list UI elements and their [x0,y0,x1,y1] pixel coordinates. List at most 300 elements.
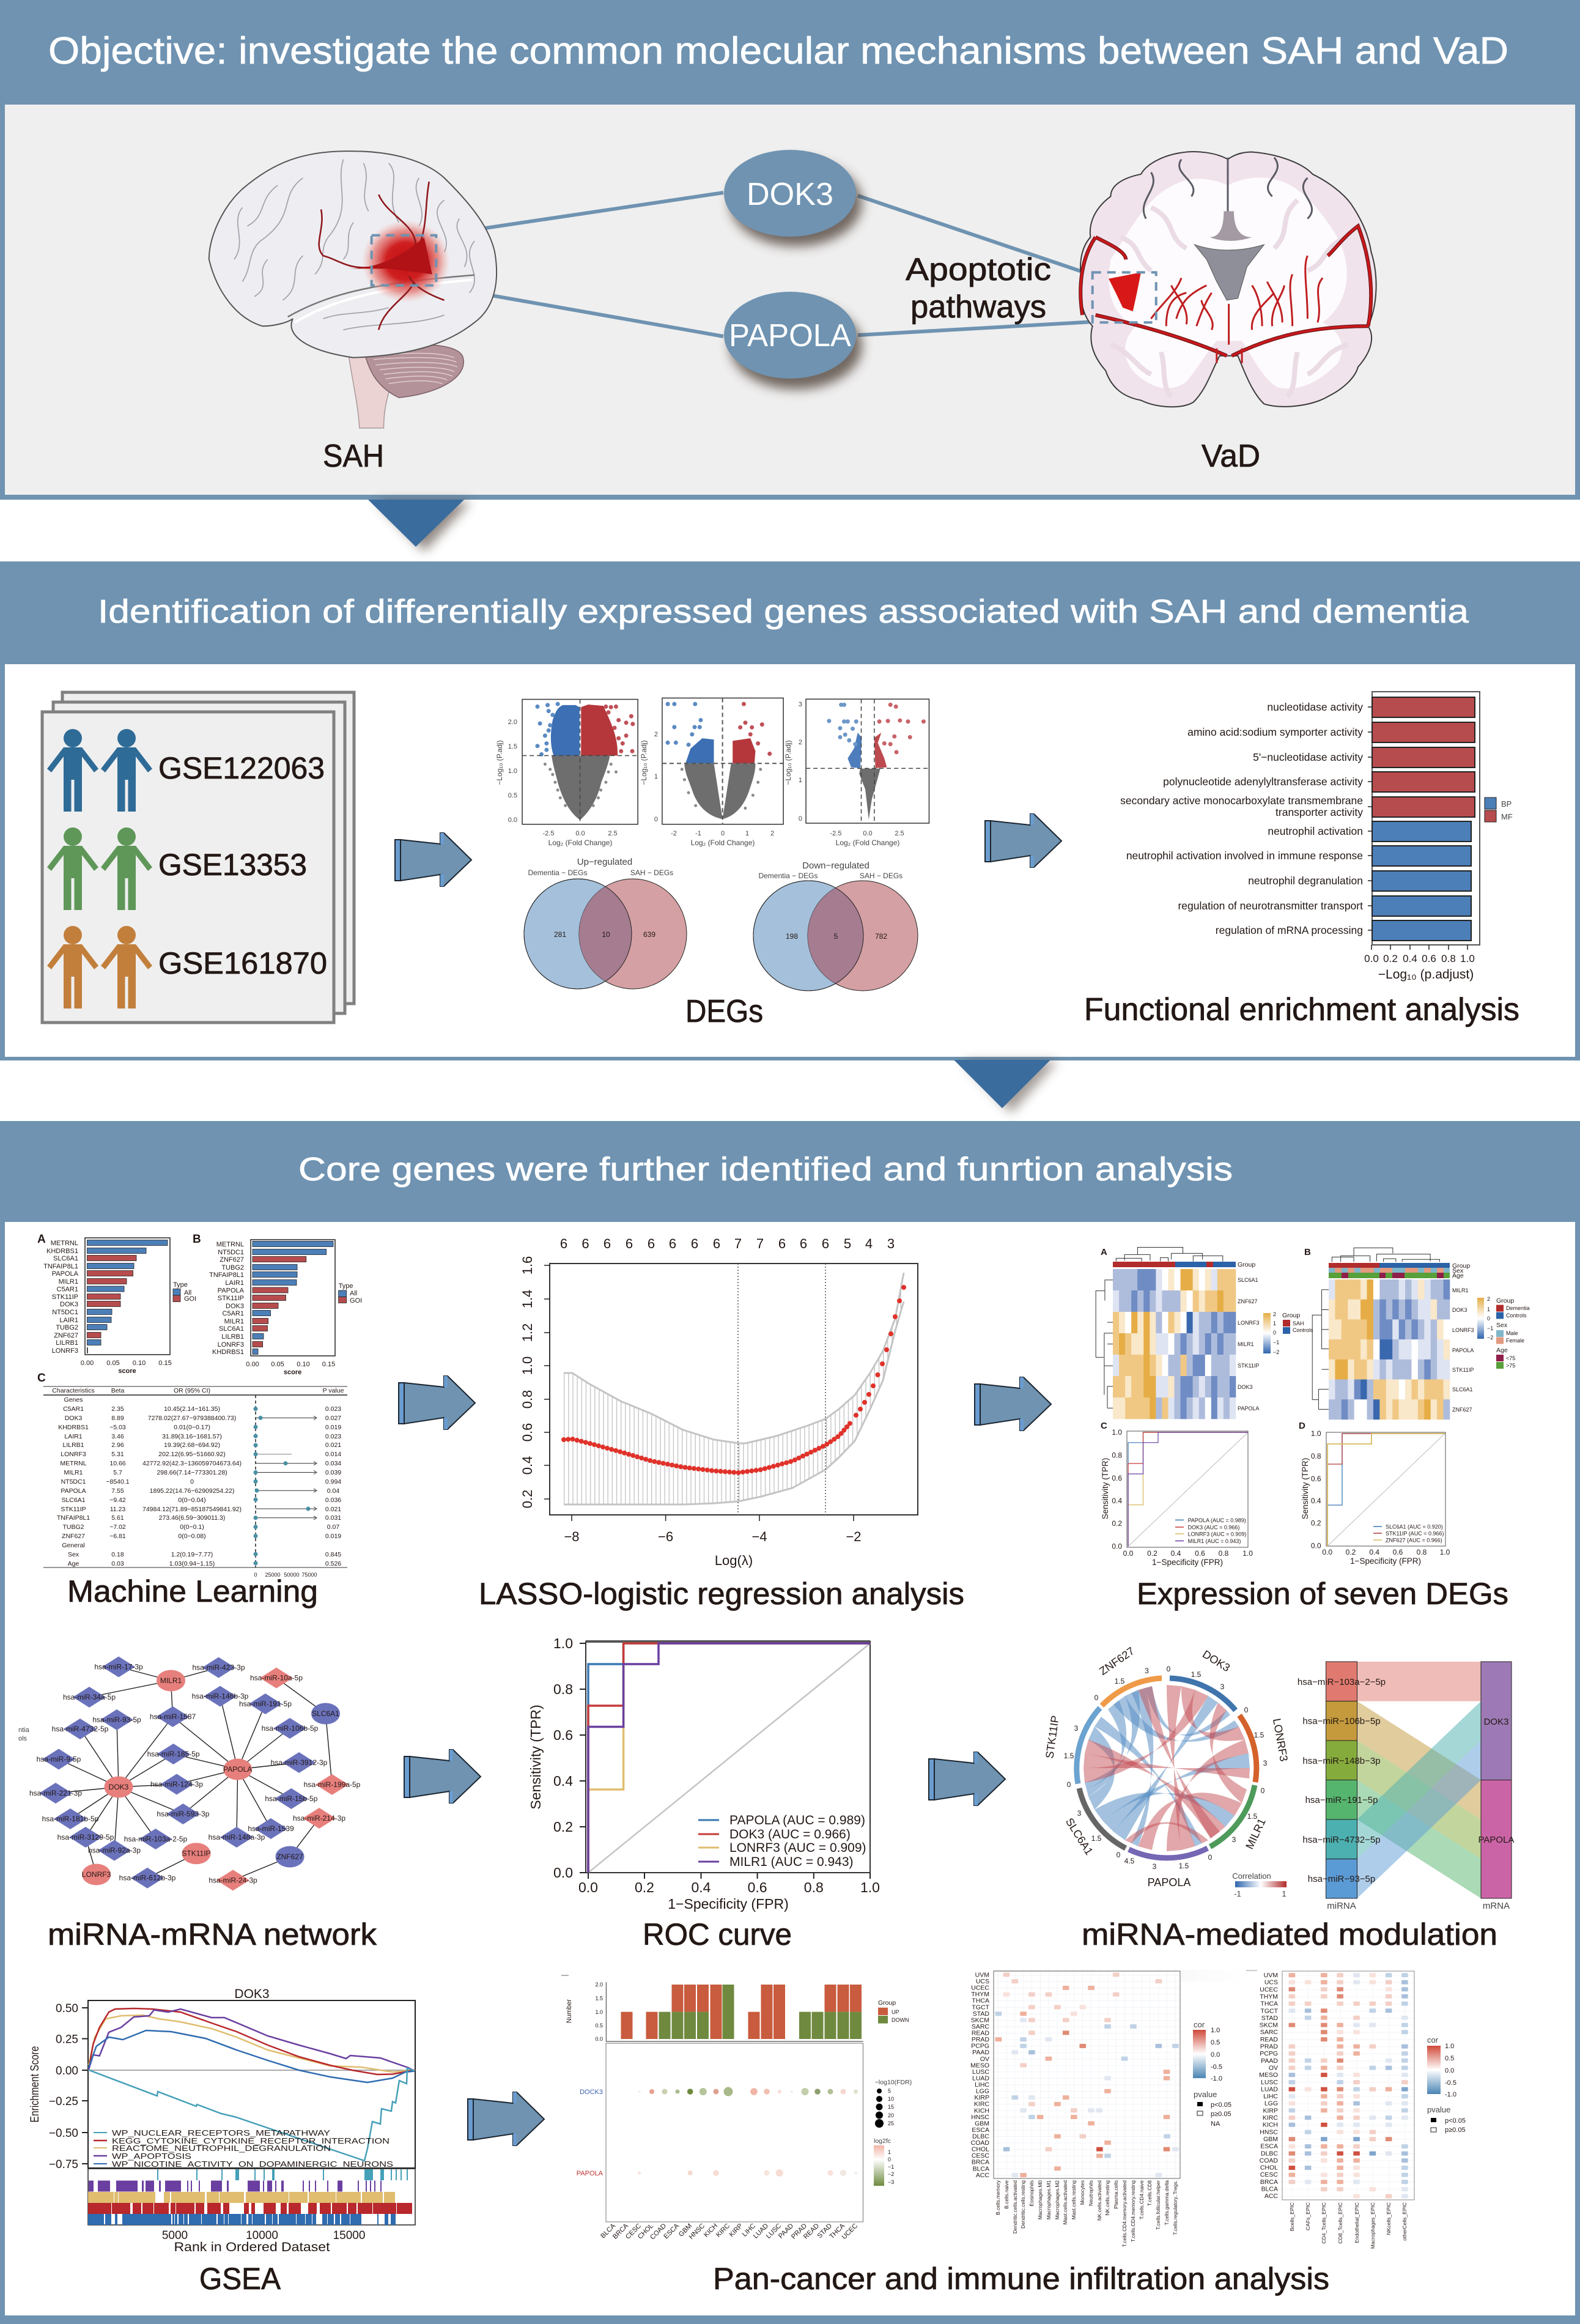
chart: immune heatmap CIBERSORT [970,1970,1243,2247]
chart: functional enrichment bars: polynucleotide adenylyltransferase activity [1163,775,1363,788]
chart: machine learning importance A: LONRF3 [52,1347,78,1355]
legend: GSEA gene sets: KEGG_CYTOKINE_CYTOKINE_RECEPTOR_INTERACTION [112,2136,389,2145]
label: pan-cancer and immune infiltration: Pan-cancer and immune infiltration analysis [713,2262,1329,2296]
chart: immune heatmap CIBERSORT: KICH [974,2107,989,2114]
chart: machine learning importance A: GOI [184,1295,196,1303]
chart: sankey [1298,1662,1514,1911]
table: forest plot: 50000 [284,1572,300,1578]
table: forest plot: SLC6A1 [61,1497,86,1504]
legend: correlation: -1 [1234,1889,1241,1898]
chart: functional enrichment bars: 0.0 [1364,953,1379,964]
table: forest plot: Age [68,1560,79,1567]
chart: machine learning importance A: TNFAIP8L1 [43,1263,78,1270]
panel: objective [0,0,1580,500]
chart: machine learning importance A: TUBG2 [56,1324,78,1331]
chart: chord diagram: 3 [1220,1682,1225,1691]
chart: miRNA-mRNA network: hsa-miR-10a-5p [250,1674,303,1682]
chart: immune heatmap CIBERSORT: Macrophages.M2 [1054,2180,1060,2219]
chart: immune heatmap CIBERSORT: Macrophages.M0 [1037,2180,1043,2219]
label: GSE122063: GSE122063 [158,751,325,785]
chart: chord diagram: 1.5 [1115,1677,1125,1686]
chart: immune heatmap CIBERSORT: DLBC [972,2133,989,2141]
chart: immune heatmap CIBERSORT: UVM [975,1972,989,1979]
chart: pan-cancer stacked bars: Number [566,1999,573,2023]
table: forest plot: 298.66(7.14−773301.28) [157,1469,227,1476]
chart: ROC curve: LONRF3 (AUC = 0.909) [729,1841,866,1855]
chart: LASSO regression: 6 [800,1236,807,1251]
chart: machine learning importance B: SLC6A1 [219,1325,244,1333]
table: forest plot: C5AR1 [63,1405,84,1413]
chart: immune heatmap EPIC: UCS [1264,1979,1278,1986]
chart: LASSO regression: 6 [669,1236,676,1251]
chart: functional enrichment bars: regulation of neurotransmitter transport [1178,900,1363,912]
legend: correlation CIBERSORT: cor [1194,2020,1205,2029]
chart: machine learning importance B: All [350,1290,357,1297]
icon: GSE13353 people [47,827,152,910]
chart: heatmap A: Controls [1293,1327,1313,1333]
chart: ROC D: Sensitivity (TPR) [1301,1458,1310,1519]
chart: machine learning importance B: Type [339,1282,353,1290]
chart: heatmap B [1304,1247,1530,1465]
chart: LASSO regression: 6 [626,1236,633,1251]
chart: ROC D: 1.0 [1311,1429,1321,1438]
chart: down-regulated venn: 782 [875,932,887,941]
legend: bubble size and colour: 25 [888,2120,894,2126]
chart: chord diagram: 3 [1153,1862,1157,1871]
chart: down-regulated venn [753,860,918,991]
table: forest plot: 0.01(0−0.17) [174,1424,210,1431]
chart: volcano plot 2: 2 [770,830,774,837]
chart: pan-cancer bubbles: PAPOLA [577,2170,604,2177]
chart: chord diagram: 1.5 [1254,1731,1264,1739]
table: forest plot: −7.02 [109,1523,126,1531]
arrow: down to section 2 [368,500,471,552]
table: forest plot: 7.55 [111,1487,124,1495]
chart: ROC C: LONRF3 (AUC = 0.909) [1188,1531,1246,1538]
chart: machine learning importance B: B [193,1233,201,1246]
legend: bubble size and colour: −log10(FDR) [875,2079,912,2086]
chart: pan-cancer bubbles: HNSC [688,2222,706,2241]
table: forest plot: 0.04 [327,1487,339,1495]
chart: miRNA-mRNA network: hsa-miR-1587 [150,1712,196,1721]
chart: sankey: DOK3 [1484,1717,1508,1727]
chart: immune heatmap CIBERSORT: NK.cells.resting [1104,2180,1110,2216]
chart: immune heatmap CIBERSORT: THCA [972,1997,989,2005]
chart: LASSO regression: −6 [658,1529,673,1544]
table: forest plot: 74984.12(71.89−85187549841.92) [142,1506,242,1513]
chart: miRNA-mRNA network: hsa-miR-1539 [248,1824,294,1833]
chart: machine learning importance B: ZNF627 [220,1256,244,1264]
chart: immune heatmap EPIC: THYM [1260,1993,1278,2000]
table: forest plot: 3.46 [111,1433,124,1440]
chart: ROC C [1101,1421,1253,1567]
chart: ROC D: 0.2 [1346,1548,1356,1556]
chart: immune heatmap CIBERSORT: UCEC [971,1985,989,1992]
chart: pan-cancer stacked bars: 1.5 [595,1996,603,2002]
chart: pan-cancer bubbles: LUSC [765,2222,783,2240]
chart: immune heatmap CIBERSORT: ESCA [972,2126,989,2134]
table: forest plot: 0.019 [325,1424,341,1431]
chart: heatmap B: Age [1496,1347,1508,1354]
chart: immune heatmap EPIC: OV [1269,2065,1278,2072]
label: ROC curve: ROC curve [643,1917,792,1952]
chart: immune heatmap CIBERSORT: CESC [972,2152,989,2159]
chart: LASSO regression: 6 [691,1236,698,1251]
chart: GSEA: −0.25 [49,2095,78,2108]
chart: immune heatmap EPIC: LIHC [1263,2093,1278,2100]
chart: volcano plot 1: 0.0 [575,830,585,837]
chart: GSEA: 0.50 [56,2002,78,2015]
chart: ROC C: 0.8 [1219,1549,1229,1558]
chart: chord diagram: ZNF627 [1097,1645,1137,1678]
chart: miRNA-mRNA network: hsa-miR-24-3p [209,1876,257,1884]
legend: bubble size and colour: 0 [888,2156,891,2163]
chart: heatmap A: 1 [1273,1320,1276,1327]
chart: machine learning importance A: All [184,1289,191,1297]
legend: bubble size and colour: −1 [888,2164,894,2170]
heading: core genes: Core genes were further identified and funrtion analysis [298,1151,1233,1188]
chart: miRNA-mRNA network: hsa-miR-92a-3p [88,1846,141,1855]
chart: pan-cancer bubbles: KIRC [715,2222,731,2239]
chart: sankey: mRNA [1483,1901,1510,1911]
chart: machine learning importance B: C5AR1 [223,1310,244,1317]
legend: correlation EPIC: p<0.05 [1445,2117,1466,2125]
table: forest plot: ZNF627 [62,1533,85,1540]
chart: sankey: hsa−miR−106b−5p [1302,1716,1381,1726]
chart: immune heatmap CIBERSORT: LGG [976,2088,989,2095]
chart: heatmap B: SLC6A1 [1452,1386,1473,1393]
chart: LASSO regression: 0.6 [520,1423,535,1441]
chart: machine learning importance A: C5AR1 [57,1286,78,1293]
chart: pan-cancer stacked bars: 1.0 [595,2009,603,2015]
chart: immune heatmap CIBERSORT: ACC [976,2172,989,2179]
chart: ROC curve: 1.0 [553,1635,573,1651]
chart: ROC curve: DOK3 (AUC = 0.966) [729,1827,851,1841]
chart: machine learning importance A [37,1233,196,1375]
chart: ROC C: 0.6 [1112,1474,1122,1482]
chart: volcano plot 1: Log₂ (Fold Change) [548,838,612,847]
chart: pan-cancer bubbles: PRAD [790,2222,808,2241]
legend: bubble size and colour: 20 [888,2112,894,2119]
chart: machine learning importance B: 0.00 [246,1361,259,1368]
arrow: DEGs to enrichment [985,814,1061,867]
chart: down-regulated venn: 198 [786,932,798,941]
chart: ROC D: 0.4 [1311,1497,1321,1505]
chart: volcano plot 3 [784,699,929,847]
chart: miRNA-mRNA network: hsa-miR-3129-5p [57,1833,114,1841]
chart: immune heatmap CIBERSORT: SARC [972,2023,989,2030]
table: forest plot: 19.39(2.68−694.92) [164,1441,220,1449]
table: forest plot: 31.89(3.16−1681.57) [162,1433,222,1440]
table: forest plot: 0.021 [325,1506,341,1513]
chart: immune heatmap CIBERSORT: Dendritic.cells.resting [1020,2180,1026,2229]
legend: correlation: Correlation [1232,1871,1271,1881]
chart: down-regulated venn: 5 [834,932,838,941]
chart: volcano plot 1: -2.5 [543,830,554,837]
legend: bubble size and colour: log2fc [874,2137,891,2145]
chart: volcano plot 1: 1.0 [508,768,517,775]
chart: miRNA-mRNA network: hsa-miR-17-3p [94,1662,143,1671]
chart: chord diagram: 0 [1261,1786,1265,1795]
chart: sankey: miRNA [1327,1901,1356,1911]
chart: pan-cancer stacked bars: 2.0 [595,1982,603,1988]
chart: volcano plot 1: 1.5 [508,743,517,750]
chart: heatmap A: A [1101,1247,1107,1257]
chart: ROC C: 0.4 [1112,1497,1122,1505]
table: forest plot: 7278.02(27.67−979388400.73) [148,1415,236,1422]
chart: down-regulated venn: SAH − DEGs [860,871,903,880]
chart: volcano plot 2: 0 [654,816,658,823]
table: forest plot: 0.023 [325,1405,341,1413]
chart: miRNA-mRNA network: ntia [18,1726,30,1734]
chart: heatmap B: Group [1452,1262,1470,1270]
chart: pan-cancer bubbles: THCA [828,2222,847,2240]
chart: machine learning importance B: 0.15 [322,1361,335,1368]
chart: immune heatmap CIBERSORT: STAD [973,2010,989,2018]
chart: immune heatmap EPIC: Bcells_EPIC [1289,2202,1295,2231]
chart: immune heatmap EPIC: CESC [1260,2171,1278,2178]
table: forest plot: 202.12(6.95−51660.92) [158,1451,226,1458]
table: forest plot: 0.031 [325,1514,341,1522]
chart: chord diagram: 0 [1208,1853,1213,1862]
illustration: VaD brain [1080,152,1376,407]
chart: ROC C: DOK3 (AUC = 0.966) [1188,1524,1239,1530]
chart: machine learning importance B: TNFAIP8L1 [209,1271,244,1279]
chart: LASSO regression: 6 [560,1236,567,1251]
chart: LASSO regression: 1.0 [520,1356,535,1375]
chart: immune heatmap CIBERSORT: T.cells.CD4.memory.activated [1121,2180,1128,2247]
chart: up-regulated venn: 281 [554,930,566,939]
chart: miRNA-mRNA network: hsa-miR-3912-3p [271,1758,328,1767]
label: apoptotic pathways [906,252,1051,325]
chart: immune heatmap CIBERSORT: T.cells.CD8 [1146,2180,1153,2206]
chart: functional enrichment bars: BP [1501,799,1512,809]
chart: chord diagram: LONRF3 [1271,1717,1290,1763]
chart: up-regulated venn: 10 [602,930,610,939]
chart: heatmap B: Male [1506,1330,1518,1336]
chart: functional enrichment bars: MF [1501,812,1513,821]
chart: ROC D: 0.2 [1311,1519,1321,1528]
chart: immune heatmap CIBERSORT: BRCA [972,2159,989,2166]
table: forest plot: TUBG2 [62,1523,84,1531]
chart: LASSO regression [520,1236,918,1568]
chart: machine learning importance A: METRNL [51,1240,78,1247]
chart: miRNA-mRNA network: hsa-miR-423-3p [192,1663,245,1672]
chart: ROC C: PAPOLA (AUC = 0.989) [1188,1517,1246,1523]
panel: core genes [0,1121,1580,2324]
table: forest plot: Beta [111,1387,124,1394]
chart: immune heatmap EPIC: UVM [1264,1972,1278,1979]
chart: GSEA: 10000 [246,2229,278,2242]
chart: pan-cancer bubbles: ESCA [662,2222,681,2240]
chart: volcano plot 2 [640,698,783,847]
illustration: SAH brain [209,151,497,428]
chart: sankey: hsa−miR−4732−5p [1302,1835,1381,1845]
chart: volcano plot 2: -1 [695,830,701,837]
chart: LASSO regression: 6 [713,1236,720,1251]
chart: LASSO regression: 0.8 [520,1390,535,1408]
table: forest plot: Sex [68,1551,79,1558]
chart: sankey: hsa−miR−148b−3p [1302,1756,1381,1766]
chart: GSEA: Enrichment Score [29,2046,42,2122]
table: forest plot: 0.994 [325,1478,341,1486]
label: expression of seven DEGs: Expression of seven DEGs [1137,1577,1508,1611]
chart: GSEA: 5000 [162,2229,188,2242]
arrow: datasets to DEGs [395,833,471,886]
chart: LASSO regression: 7 [734,1236,742,1251]
table: forest plot: −6.81 [109,1533,126,1540]
chart: machine learning importance B: STK11IP [218,1295,244,1302]
chart: heatmap B: Sex [1496,1322,1508,1329]
chart: ROC D: 0.0 [1311,1542,1321,1550]
chart: sankey: PAPOLA [1478,1835,1514,1845]
legend: correlation EPIC: pvalue [1427,2105,1450,2114]
chart: functional enrichment bars: neutrophil activation [1268,825,1363,837]
chart: GSEA: Rank in Ordered Dataset [174,2240,330,2254]
chart: ROC curve: 0.0 [578,1879,598,1895]
gene nodes [82,1670,340,1885]
chart: immune heatmap CIBERSORT: Macrophages.M1 [1046,2180,1052,2219]
chart: immune heatmap CIBERSORT: KIRP [974,2094,989,2101]
table: forest plot: NT5DC1 [61,1478,86,1486]
chart: ROC C: 1−Specificity (FPR) [1152,1558,1223,1567]
chart: heatmap A: SLC6A1 [1238,1277,1258,1283]
label: VaD: VaD [1202,439,1260,474]
chart: pan-cancer stacked bars: DOWN [892,2017,909,2023]
chart: volcano plot 2: -2 [671,830,677,837]
chart: chord diagram: 3 [1263,1759,1268,1767]
chart: machine learning importance A: KHDRBS1 [46,1248,78,1255]
chart: machine learning importance B: KHDRBS1 [212,1349,244,1356]
label: GSE13353: GSE13353 [158,848,307,882]
chart: heatmap A: LONRF3 [1238,1320,1260,1326]
chart: volcano plot 3: −Log₁₀ (P.adj) [784,740,792,785]
chart: immune heatmap EPIC: COAD [1260,2157,1278,2164]
legend: correlation CIBERSORT: pvalue [1194,2090,1217,2099]
table: forest plot: 0.039 [325,1469,341,1476]
chart: volcano plot 3: 1 [799,777,802,784]
chart: ROC C: 0.4 [1171,1549,1181,1558]
chart: ROC D: 0.8 [1417,1548,1427,1556]
icon: GSE161870 people [47,926,152,1008]
chart: machine learning importance A: Type [173,1281,188,1289]
chart: ROC D: 0.4 [1369,1548,1379,1556]
chart: ROC C: MILR1 (AUC = 0.943) [1188,1538,1241,1544]
chart: LASSO regression: −2 [846,1529,862,1544]
chart: miRNA-mRNA network: SLC6A1 [312,1709,339,1718]
chart: immune heatmap CIBERSORT: LUSC [972,2068,989,2076]
chart: ROC curve: 0.4 [692,1879,711,1895]
table: forest plot: 10.45(2.14−161.35) [164,1405,220,1413]
chart: immune heatmap CIBERSORT: Monocytes [1079,2180,1085,2205]
chart: volcano plot 2: −Log₁₀ (P.adj) [640,740,648,785]
chart: machine learning importance B: LILRB1 [221,1333,244,1341]
chart: functional enrichment bars: 5'−nucleotidase activity [1253,751,1363,763]
chart: machine learning importance A: 0.15 [158,1360,172,1367]
chart: functional enrichment bars: neutrophil activation involved in immune response [1126,849,1363,862]
chart: pan-cancer bubbles: CESC [624,2222,643,2241]
chart: ROC C: 0.2 [1147,1549,1157,1558]
legend: correlation EPIC: 0.5 [1445,2055,1454,2062]
legend: bubble size and colour: 5 [888,2088,891,2094]
table: forest plot: 0.845 [325,1551,341,1558]
chart: immune heatmap EPIC: PAAD [1261,2057,1278,2065]
chart: heatmap B: <75 [1506,1355,1515,1361]
chart: ROC curve: PAPOLA (AUC = 0.989) [729,1813,865,1827]
chart: chord diagram: 3 [1232,1835,1236,1844]
gene node: PAPOLA [724,292,862,390]
legend: bubble size and colour: −2 [888,2171,894,2177]
chart: miRNA-mRNA network: hsa-miR-185-5p [147,1750,200,1758]
legend: correlation EPIC: p≥0.05 [1445,2126,1466,2134]
chart: pan-cancer bubbles: GBM [677,2222,693,2238]
chart: ROC curve: 0.4 [553,1773,573,1789]
chart: volcano plot 2: 1 [745,830,749,837]
chart: immune heatmap EPIC: THCA [1260,2000,1278,2008]
chart: machine learning importance A: A [37,1233,46,1246]
chart: immune heatmap CIBERSORT: T.cells.regulatory..Tregs. [1172,2180,1178,2235]
chart: chord diagram: 1.5 [1091,1834,1102,1843]
chart: machine learning importance B: METRNL [216,1241,244,1248]
chart: machine learning importance A: LAIR1 [59,1317,78,1324]
chart: heatmap A: DOK3 [1238,1384,1253,1390]
legend: correlation CIBERSORT: p<0.05 [1211,2101,1231,2109]
table: forest plot: LILRB1 [62,1441,84,1449]
chart: miRNA-mRNA network: hsa-miR-103a-2-5p [124,1835,188,1843]
chart: chord diagram: 0 [1067,1780,1071,1789]
chart: pan-cancer bubbles: UCEC [841,2222,859,2241]
chart: immune heatmap EPIC: MESO [1259,2071,1278,2079]
chart: immune heatmap EPIC: LUSC [1261,2079,1278,2086]
chart: down-regulated venn: Dementia − DEGs [758,871,818,880]
chart: heatmap A: −2 [1273,1349,1279,1355]
arrow: LASSO to expression [975,1377,1051,1430]
chart: immune heatmap CIBERSORT: Neutrophils [1088,2180,1094,2206]
chart: pan-cancer bubbles: BRCA [611,2222,630,2241]
chart: ROC C: C [1101,1421,1107,1431]
legend: GSEA gene sets: WP_NICOTINE_ACTIVITY_ON_DOPAMINERGIC_NEURONS [112,2159,393,2169]
chart: chord diagram: 3 [1074,1724,1079,1733]
arrow: ML to LASSO [399,1376,475,1429]
chart: functional enrichment bars: 0.6 [1422,953,1436,964]
chart: ROC D: 1−Specificity (FPR) [1350,1556,1421,1566]
chart: immune heatmap CIBERSORT: SKCM [971,2016,989,2024]
chart: immune heatmap EPIC: CHOL [1260,2164,1278,2172]
chart: machine learning importance B: 0.10 [297,1361,310,1368]
chart: immune heatmap EPIC: ACC [1264,2193,1278,2200]
chart: ROC C: Sensitivity (TPR) [1101,1458,1110,1519]
chart: immune heatmap EPIC: Endothelial_EPIC [1354,2202,1360,2243]
chart: chord diagram: 1.5 [1247,1812,1258,1821]
legend: correlation CIBERSORT: 0.0 [1211,2051,1220,2059]
table: forest plot: 5.31 [111,1451,124,1458]
label: GSEA: GSEA [199,2262,281,2296]
chart: immune heatmap EPIC: SARC [1260,2029,1278,2036]
chart: GSEA: 15000 [333,2229,365,2242]
chart: immune heatmap EPIC: LUAD [1261,2085,1278,2093]
chart: functional enrichment bars: nucleotidase activity [1267,701,1363,713]
table: forest plot: 1895.22(14.76−62909254.22) [150,1487,234,1495]
chart: immune heatmap EPIC: TGCT [1260,2007,1279,2015]
chart: heatmap B: ZNF627 [1452,1407,1472,1413]
legend: bubble size and colour: 10 [888,2096,894,2102]
chart: functional enrichment bars: 0.8 [1441,953,1456,964]
chart: pan-cancer bubbles: KIRP [728,2222,744,2238]
label: DEGs: DEGs [685,994,763,1029]
chart: machine learning importance B: 0.05 [271,1361,284,1368]
chart: immune heatmap CIBERSORT: GBM [975,2120,989,2127]
chart: GSEA [29,1987,415,2254]
